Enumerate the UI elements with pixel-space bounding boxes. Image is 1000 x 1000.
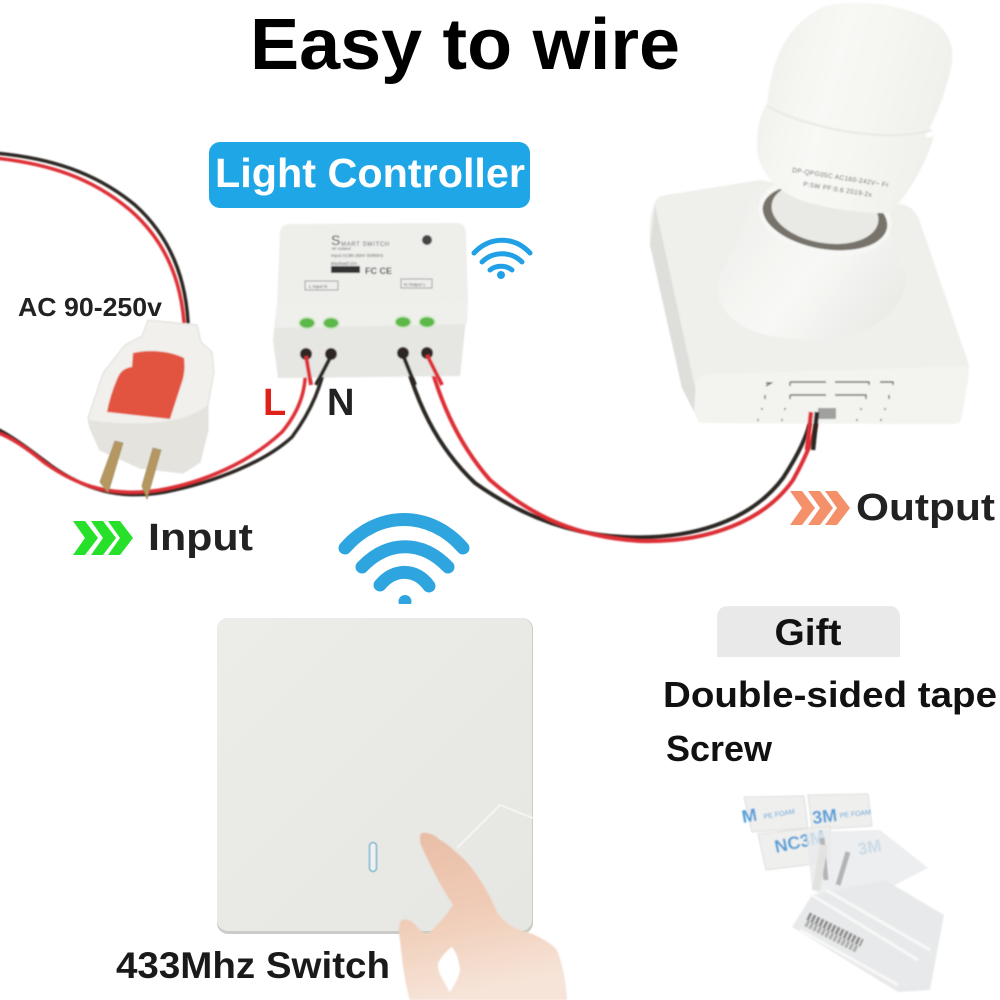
light controller device xyxy=(273,223,468,385)
hand xyxy=(399,833,567,1000)
bulb print: P:5W PF:0.6 2019-2x xyxy=(803,181,873,199)
large bag xyxy=(792,880,944,992)
bulb xyxy=(757,3,952,213)
switch label: 433Mhz Switch xyxy=(116,945,390,986)
tape brand print: NC3M xyxy=(773,827,827,857)
index finger and palm xyxy=(399,833,567,1000)
light controller label: Light Controller xyxy=(215,150,525,196)
tape brand print: PE FOAM xyxy=(763,809,796,821)
lamp xyxy=(650,3,969,450)
gift label xyxy=(717,606,900,657)
light controller label xyxy=(209,142,530,208)
device label print: MART SWITCH xyxy=(341,242,390,248)
bagged screws xyxy=(808,916,862,943)
device label print: N Output L xyxy=(404,282,426,287)
panel reflection xyxy=(457,805,533,848)
tape brand print xyxy=(740,805,883,859)
output label: Output xyxy=(856,487,995,529)
device label print: FC CE xyxy=(365,266,392,276)
plug red face xyxy=(107,351,185,419)
tape brand print: PE FOAM xyxy=(839,809,872,820)
icon: large wifi xyxy=(345,520,463,604)
foam tape pads xyxy=(744,794,872,870)
indicator hole xyxy=(422,235,432,245)
device label print: S xyxy=(331,232,340,248)
plug pins xyxy=(100,441,123,493)
gap between fingers xyxy=(438,947,460,992)
device label print xyxy=(305,232,432,290)
bulb print xyxy=(792,167,890,199)
bulb print: DP-QPG05C AC160-242V~ Fr xyxy=(792,167,890,189)
gift accessories: tape and screws xyxy=(740,794,944,992)
tape brand print: 3M xyxy=(811,805,838,828)
LED indicator xyxy=(370,842,376,872)
small bag xyxy=(806,830,928,908)
N terminal label: N xyxy=(327,382,354,424)
device label print: L Input N xyxy=(309,284,327,289)
icon: small wifi xyxy=(474,240,530,276)
wires: input cable xyxy=(0,153,328,495)
gift item text: screw: Screw xyxy=(666,728,773,769)
arrow: output chevrons xyxy=(790,491,850,525)
base vent pattern xyxy=(758,382,893,421)
wall switch panel xyxy=(217,618,533,934)
socket xyxy=(717,190,907,340)
device label print: Input:AC90-250V 50/60Hz xyxy=(331,253,384,258)
arrow: input chevrons xyxy=(73,521,133,555)
gift item text: tape: Double-sided tape xyxy=(663,674,997,715)
lamp base xyxy=(650,180,969,424)
wire ports xyxy=(300,347,433,360)
plug xyxy=(88,320,214,499)
green terminals xyxy=(299,316,435,328)
tape brand print: M xyxy=(740,805,758,827)
input label: Input xyxy=(148,517,253,559)
AC voltage label: AC 90-250v xyxy=(18,292,163,322)
device label print: RF 433MHZ xyxy=(332,247,352,251)
gift label: Gift xyxy=(774,612,842,653)
tape brand print: 3M xyxy=(856,836,883,859)
anchors and screws xyxy=(822,838,848,885)
device label print: Maxload:10A xyxy=(331,261,357,266)
cable slot xyxy=(818,408,836,419)
L terminal label: L xyxy=(263,382,286,424)
title: Easy to wire xyxy=(250,5,680,85)
wires: output cable xyxy=(403,352,818,541)
